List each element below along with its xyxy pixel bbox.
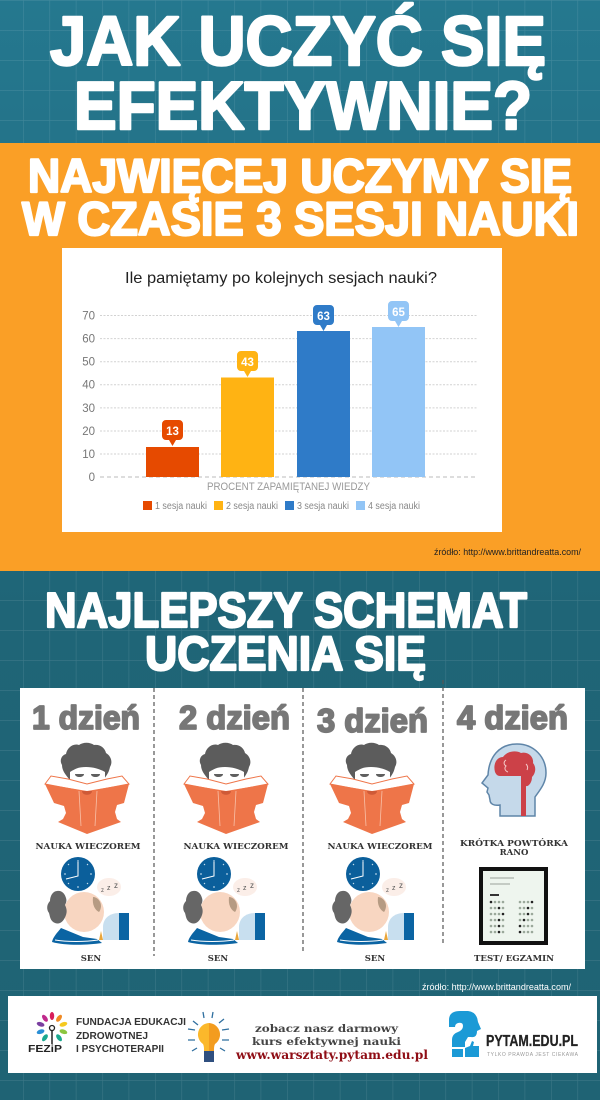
bar: 2 sesja 43 bbox=[221, 351, 274, 477]
course promo: kurs efektywnej nauki bbox=[252, 1036, 401, 1048]
foundation name bbox=[76, 1017, 186, 1055]
title bbox=[50, 2, 546, 144]
icon: head with brain bbox=[482, 744, 546, 816]
foundation name: FUNDACJA EDUKACJI bbox=[76, 1017, 186, 1028]
foundation name: I PSYCHOTERAPII bbox=[76, 1044, 164, 1055]
label: evening study: NAUKA WIECZOREM bbox=[184, 842, 289, 852]
legend: 4 sesja nauki bbox=[368, 501, 420, 512]
bar: 3 sesja 63: 63 bbox=[317, 311, 330, 323]
logo: FEZiP bbox=[28, 1012, 186, 1055]
label: sleep: SEN bbox=[365, 954, 385, 964]
bar chart bbox=[82, 301, 478, 484]
day 3 heading: 3 dzień bbox=[317, 702, 428, 739]
day 1 heading: 1 dzień bbox=[32, 699, 140, 736]
url: www.warsztaty.pytam.edu.pl bbox=[235, 1048, 428, 1062]
y axis labels: 60 bbox=[82, 334, 95, 346]
legend: 1 sesja nauki bbox=[155, 501, 207, 512]
panel: schedule bbox=[20, 680, 585, 969]
source note: źródło: http://www.brittandreatta.com/ bbox=[434, 547, 581, 558]
y axis labels bbox=[82, 310, 95, 484]
y axis labels: 40 bbox=[82, 380, 95, 392]
panel: footer bbox=[8, 996, 597, 1073]
heading: most learning in 3 sessions bbox=[22, 149, 579, 245]
legend: 2 sesja nauki bbox=[226, 501, 278, 512]
legend bbox=[143, 501, 420, 512]
label: sleep: SEN bbox=[81, 954, 101, 964]
icon: question mark head bbox=[449, 1011, 481, 1057]
bar: 1 sesja 13 bbox=[146, 420, 199, 477]
icon: sleep bbox=[332, 857, 414, 945]
panel: orange section bbox=[0, 143, 600, 571]
icon: test sheet bbox=[481, 869, 546, 943]
chart title: Ile pamiętamy po kolejnych sesjach nauki? bbox=[125, 270, 437, 287]
label: evening study: NAUKA WIECZOREM bbox=[328, 842, 433, 852]
y axis labels: 0 bbox=[89, 472, 95, 484]
logo: pytam.edu.pl bbox=[449, 1011, 579, 1058]
heading: best learning schedule: NAJLEPSZY SCHEMAT bbox=[45, 584, 527, 638]
heading: most learning in 3 sessions: W CZASIE 3 SESJI NAUKI bbox=[22, 192, 579, 245]
icon: flower bbox=[36, 1012, 68, 1044]
column: day 1 bbox=[32, 699, 141, 964]
source note: źródło: http://www.brittandreatta.com/ bbox=[422, 982, 571, 993]
foundation name: ZDROWOTNEJ bbox=[76, 1031, 148, 1042]
label: test / exam: TEST/ EGZAMIN bbox=[474, 954, 554, 964]
icon: reading bbox=[330, 743, 414, 834]
label: sleep: SEN bbox=[208, 954, 228, 964]
icon: sleep bbox=[183, 857, 265, 945]
y axis labels: 50 bbox=[82, 356, 95, 368]
y axis labels: 70 bbox=[82, 310, 95, 322]
bar: 4 sesja 65: 65 bbox=[392, 307, 405, 319]
bar: 2 sesja 43: 43 bbox=[241, 357, 254, 369]
title: JAK UCZYĆ SIĘ bbox=[50, 2, 546, 80]
label: short morning review: KRÓTKA POWTÓRKA bbox=[460, 837, 568, 849]
icon: reading bbox=[184, 743, 268, 834]
axis title: PROCENT ZAPAMIĘTANEJ WIEDZY bbox=[207, 481, 371, 493]
label: short morning review bbox=[460, 837, 568, 858]
label: evening study: NAUKA WIECZOREM bbox=[36, 842, 141, 852]
panel: chart card bbox=[62, 248, 502, 532]
y axis labels: 20 bbox=[82, 426, 95, 438]
label: short morning review: RANO bbox=[500, 848, 529, 858]
legend: 3 sesja nauki bbox=[297, 501, 349, 512]
icon: light bulb bbox=[188, 1012, 229, 1062]
bar: 4 sesja 65 bbox=[372, 301, 425, 477]
icon: sleep bbox=[47, 857, 129, 945]
logo wordmark: FEZiP bbox=[28, 1043, 62, 1055]
bar: 3 sesja 63 bbox=[297, 305, 350, 477]
y axis labels: 30 bbox=[82, 403, 95, 415]
course promo: zobacz nasz darmowy bbox=[255, 1023, 399, 1035]
heading: best learning schedule: UCZENIA SIĘ bbox=[145, 628, 426, 681]
heading: most learning in 3 sessions: NAJWIĘCEJ UCZYMY SIĘ bbox=[28, 149, 572, 202]
heading: best learning schedule bbox=[45, 584, 527, 681]
course promo bbox=[235, 1023, 428, 1062]
title: EFEKTYWNIE? bbox=[74, 68, 532, 144]
day 2 heading: 2 dzień bbox=[179, 699, 290, 736]
y axis labels: 10 bbox=[82, 449, 95, 461]
day 4 heading: 4 dzień bbox=[457, 699, 568, 736]
column: day 2 bbox=[179, 699, 290, 964]
tagline: TYLKO PRAWDA JEST CIEKAWA bbox=[487, 1052, 579, 1058]
column: day 4 bbox=[457, 699, 568, 964]
column: day 3 bbox=[317, 702, 433, 964]
bar: 1 sesja 13: 13 bbox=[166, 426, 179, 438]
icon: reading bbox=[45, 743, 129, 834]
